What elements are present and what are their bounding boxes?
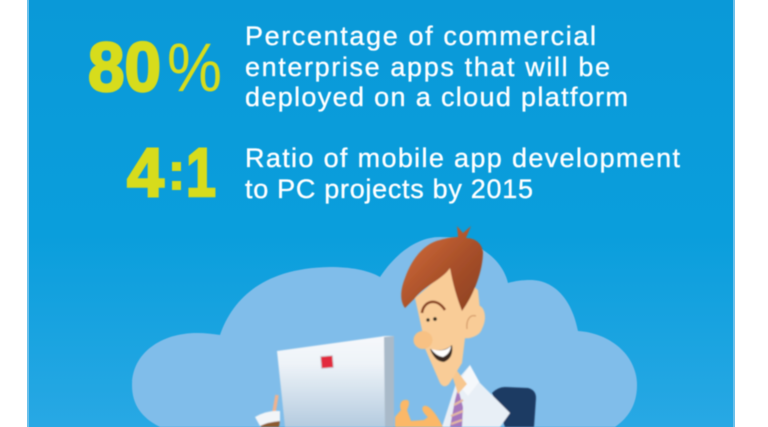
figure: 4:1: 1 <box>186 134 216 211</box>
figure: 80%: % <box>167 29 222 106</box>
figure: 80%: 80 <box>88 28 161 106</box>
icon: chair <box>492 387 536 427</box>
ear <box>463 305 485 338</box>
head <box>395 226 485 427</box>
illustration: developer at laptop <box>255 226 536 427</box>
description: 4 to 1 ratio: to PC projects by 2015 <box>245 174 533 204</box>
figure: 4:1: 4 <box>127 134 164 211</box>
figure: 4:1 <box>127 134 216 211</box>
icon: coffee cup <box>255 395 280 427</box>
hands <box>395 400 443 427</box>
description: 80 percent: deployed on a cloud platform <box>245 82 628 112</box>
icon: laptop lid <box>277 336 394 427</box>
nose <box>414 331 432 349</box>
statistic: 80 percent <box>88 21 628 112</box>
eyes <box>426 318 430 322</box>
description: 80 percent: Percentage of commercial <box>245 21 596 51</box>
hair <box>401 226 483 311</box>
mouth <box>430 345 452 362</box>
figure: 80% <box>88 28 222 106</box>
description: 4 to 1 ratio: Ratio of mobile app development <box>245 143 680 173</box>
description: 80 percent <box>245 21 628 112</box>
statistic: 4 to 1 ratio <box>127 134 680 211</box>
description: 4 to 1 ratio <box>245 143 680 204</box>
description: 80 percent: enterprise apps that will be <box>245 52 610 82</box>
shirt and tie <box>442 365 510 427</box>
illustration: cloud <box>132 237 637 427</box>
eyebrow <box>422 302 445 313</box>
